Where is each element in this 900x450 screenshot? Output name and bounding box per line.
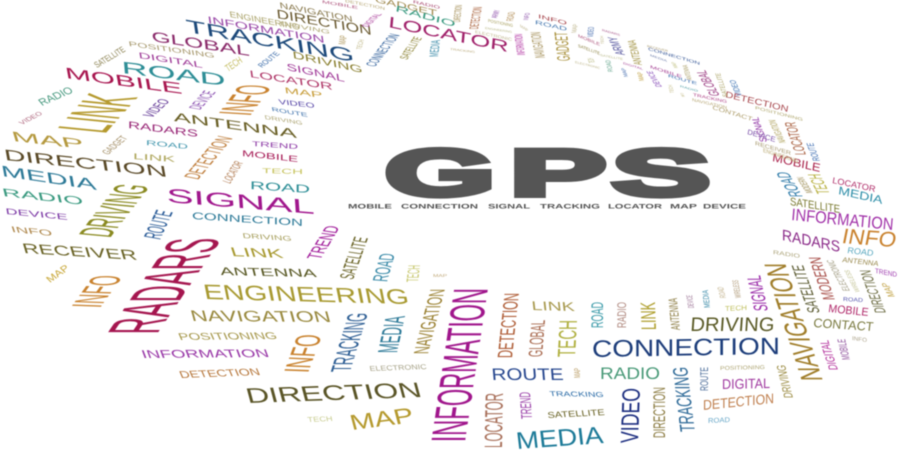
words: top centre: RADIO <box>395 3 456 29</box>
words: lower centre <box>420 288 796 450</box>
words: top centre: TECH <box>585 58 597 63</box>
words: top centre: SATELLITE <box>578 43 600 56</box>
words: upper left: DRIVING <box>280 20 330 35</box>
words: upper right: NAVIGATION <box>692 97 727 110</box>
words: lower centre: TRACKING <box>667 367 700 432</box>
words: lower left: LINK <box>228 244 286 261</box>
words: lower left: ELECTRONIC <box>369 362 427 372</box>
words: lower left: MEDIA <box>371 315 411 353</box>
words: upper right: SATELLITE <box>713 73 730 97</box>
words: right side: MAP <box>879 283 897 297</box>
words: upper left: DIRECTION <box>276 6 372 38</box>
words: right side: DIGITAL <box>816 340 841 370</box>
words: right side: ELECTRONIC <box>824 260 852 291</box>
words: upper left: DRIVING <box>67 182 160 239</box>
words: right side: SIGNAL <box>749 117 769 142</box>
words: right side: ROAD <box>843 296 863 303</box>
word: LINK: LINK <box>40 90 154 136</box>
words: right side: CONTACT <box>712 104 754 122</box>
words: right side: MEDIA <box>838 184 884 207</box>
words: right side: RECEIVER <box>755 140 791 156</box>
words: upper right: TECH <box>599 36 605 44</box>
words: upper left: DETECTION <box>178 134 238 181</box>
words: upper left: INFORMATION <box>207 14 325 45</box>
word: DIRECTION: DIRECTION <box>2 146 169 180</box>
words: right side: TECH <box>803 174 834 194</box>
words: right side: ANTENNA <box>842 256 880 268</box>
words: upper left <box>0 0 372 241</box>
words: upper left: VIDEO <box>139 97 173 119</box>
word: NAVIGATION: NAVIGATION <box>188 307 333 325</box>
words: right side: TREND <box>875 266 897 279</box>
words: top centre: ROAD <box>504 12 517 21</box>
words: lower left: POSITIONING <box>176 330 279 342</box>
words: upper right: INFO <box>679 93 686 97</box>
words: upper right: GLOBAL <box>692 70 723 96</box>
words: upper left: TECH <box>262 166 303 176</box>
words: upper right: ANTENNA <box>625 40 644 65</box>
word: SIGNAL: SIGNAL <box>166 184 316 218</box>
words: lower left: DETECTION <box>177 366 262 380</box>
words: upper right: ANTENNA <box>680 65 694 80</box>
word: INFORMATION: INFORMATION <box>420 288 498 442</box>
words: upper left: TECH <box>223 54 244 74</box>
word: LOCATOR: LOCATOR <box>388 13 509 55</box>
words: lower centre: DIRECTION <box>649 387 669 438</box>
words: lower left: INFO <box>276 334 330 373</box>
words: upper left: MEDIA <box>0 162 99 194</box>
words: right side: ROAD <box>771 172 807 197</box>
words: top centre: CONNECTION <box>362 32 403 68</box>
word: ROUTE: ROUTE <box>491 364 564 384</box>
title: GPS: P <box>510 136 606 210</box>
words: upper left: RADARS <box>128 119 198 139</box>
subtitle: keyword line: MAP <box>670 204 698 210</box>
words: upper left: NAVIGATION <box>279 0 353 24</box>
words: top centre: MAP <box>336 35 349 45</box>
words: lower centre: ROAD <box>708 415 730 424</box>
words: upper right: RADARS <box>602 28 620 37</box>
words: right side: DETECTION <box>725 89 789 114</box>
word: DIRECTION: DIRECTION <box>243 377 424 408</box>
words: right side: CONTACT <box>813 315 875 334</box>
subtitle: keyword line: SIGNAL <box>488 204 530 210</box>
subtitle: keyword line: LOCATOR <box>608 204 662 210</box>
words: top centre: ELECTRONIC <box>575 60 600 70</box>
words: right side: RADIO <box>773 249 800 259</box>
title: GPS: G <box>385 136 495 210</box>
words: lower left: INFORMATION <box>139 347 271 360</box>
words: right side: POSITIONING <box>755 105 803 122</box>
words: lower left: SATELLITE <box>335 235 372 281</box>
word: INFO: INFO <box>207 83 282 117</box>
words: upper left: SIGNAL <box>286 61 346 84</box>
words: upper left: DEVICE <box>5 206 68 222</box>
word: INFO: INFO <box>840 224 899 252</box>
words: upper left: POSITIONING <box>128 40 215 60</box>
words: upper left: VIDEO <box>17 110 44 126</box>
words: lower centre: ROUTE <box>698 367 710 391</box>
word: ENGINEERING: ENGINEERING <box>201 280 411 309</box>
words: right side <box>614 89 899 381</box>
words: top centre: NAVIGATION <box>527 32 548 58</box>
words: right side: ENGINEERING <box>763 147 798 164</box>
word: MAP: MAP <box>347 402 416 434</box>
words: right side: RADARS <box>782 226 840 255</box>
words: right side: SIGNAL <box>742 275 772 311</box>
words: right side: ROAD <box>715 287 728 298</box>
words: right side: LOCATOR <box>781 122 809 155</box>
word: ANTENNA: ANTENNA <box>173 109 298 141</box>
words: top centre: VIDEO <box>585 27 596 37</box>
words: upper left: GADGET <box>99 134 130 156</box>
words: top centre: TRACKING <box>450 47 475 54</box>
words: right side: WIRELESS <box>843 270 862 292</box>
words: upper left: TREND <box>252 140 298 151</box>
words: right side: MOBILE <box>835 339 852 360</box>
words: upper right: RADIO <box>680 84 698 93</box>
words: lower left: NAVIGATION <box>408 289 450 354</box>
words: lower left: ANTENNA <box>218 265 319 279</box>
words: right side: MEDIA <box>700 290 712 308</box>
words: lower centre: TECH <box>552 320 582 357</box>
words: upper right: MAP <box>620 68 629 77</box>
words: lower centre: DETECTION <box>703 390 774 413</box>
words: right side: DIRECTION <box>856 270 889 313</box>
words: right side: LOCATOR <box>832 175 876 194</box>
words: top centre: ARMY <box>489 10 502 18</box>
subtitle: keyword line: CONNECTION <box>401 204 478 210</box>
words: upper right: VIDEO <box>727 80 744 96</box>
words: lower centre: RADIO <box>600 363 660 383</box>
words: upper left: DRIVING <box>264 114 303 126</box>
words: upper left: ROUTE <box>271 106 308 118</box>
words: upper left: SATELLITE <box>92 44 127 70</box>
words: lower left: ROAD <box>368 253 400 282</box>
words: lower centre: POSITIONING <box>720 364 765 371</box>
words: right side: ROUTE <box>804 143 822 161</box>
words: upper right: MOBILE <box>650 64 682 79</box>
words: lower left: MAP <box>44 262 72 284</box>
words: upper left: CONNECTION <box>192 210 303 228</box>
words: lower left <box>9 224 450 434</box>
words: top centre: ENGINEERING <box>485 26 512 34</box>
word: MOBILE: MOBILE <box>63 64 184 97</box>
words: top centre: ELECTRONIC <box>475 29 512 42</box>
words: lower centre: DRIVING <box>773 365 796 398</box>
words: upper left: RADIO <box>0 186 85 207</box>
words: top centre: INFORMATION <box>512 34 527 55</box>
words: lower left: INFO <box>9 224 54 238</box>
words: upper left: ENGINEERING <box>229 9 300 32</box>
words: lower centre: DETECTION <box>492 293 524 358</box>
words: top centre: INFO <box>538 13 567 26</box>
words: top centre: DETECTION <box>466 7 485 29</box>
words: lower centre: TREND <box>516 392 535 419</box>
word: ROAD: ROAD <box>121 57 226 90</box>
words: upper left: LOCATOR <box>249 68 333 92</box>
words: upper right: ROAD <box>603 60 614 72</box>
words: top centre <box>322 0 600 70</box>
words: upper left: ROAD <box>250 179 310 195</box>
words: lower left: TECH <box>402 265 424 282</box>
words: top centre: ROAD <box>535 19 567 32</box>
words: lower centre: TRACKING <box>549 390 604 399</box>
words: right side: MODERN <box>804 257 839 300</box>
words: upper right: DEVICE <box>644 71 664 87</box>
words: right side: DEVICE <box>684 295 696 308</box>
words: top centre: SATELLITE <box>397 35 424 61</box>
words: upper left: MAP <box>9 128 86 152</box>
words: right side: ROAD <box>847 245 874 258</box>
words: top centre: MAP <box>520 23 528 33</box>
words: upper right: MAP <box>635 72 646 81</box>
words: lower left: DRIVING <box>242 232 292 243</box>
words: upper right: SATELLITE <box>600 53 623 61</box>
subtitle: keyword line: MOBILE <box>348 204 393 210</box>
words: lower left: MAP <box>433 273 447 278</box>
words: lower centre: LINK <box>531 298 576 314</box>
words: upper right: MAP <box>670 62 679 68</box>
words: upper left: ROAD <box>146 138 188 151</box>
words: right side: RADIO <box>614 302 629 328</box>
words: right side: INFORMATION <box>791 204 894 234</box>
words: upper right: TECH <box>667 85 675 93</box>
subtitle: keyword line <box>348 204 747 210</box>
words: upper right: RECEIVER <box>647 44 668 53</box>
word: INFO: INFO <box>61 275 132 308</box>
title: GPS <box>385 136 710 210</box>
subtitle: keyword line: DEVICE <box>703 204 747 210</box>
words: right side: WIRELESS <box>730 280 743 298</box>
word: VIDEO: VIDEO <box>615 388 645 443</box>
words: upper left: RADIO <box>36 84 76 108</box>
words: upper left: ROUTE <box>256 50 282 69</box>
words: lower left: TREND <box>302 224 344 261</box>
words: right side: SATELLITE <box>787 265 824 313</box>
words: upper left: VIDEO <box>278 98 315 110</box>
word: RADARS: RADARS <box>89 238 238 334</box>
words: right side: NAVIGATION <box>766 120 788 143</box>
words: lower centre: DIGITAL <box>722 375 770 392</box>
words: top centre: POSITIONING <box>488 18 513 28</box>
word: NAVIGATION: NAVIGATION <box>756 263 830 381</box>
words: lower centre: ROAD <box>587 302 607 328</box>
words: lower left: TECH <box>307 414 333 424</box>
words: upper left: MAP <box>284 85 323 100</box>
words: top centre: DIGITAL <box>359 13 384 27</box>
words: upper right <box>599 28 744 110</box>
words: upper right: DIGITAL <box>623 61 643 71</box>
words: right side: INFO <box>852 335 867 343</box>
words: lower centre: GLOBAL <box>524 320 549 357</box>
words: top centre: DIRECTION <box>451 5 464 22</box>
words: right side: MOBILE <box>772 151 821 174</box>
words: upper left: DEVICE <box>184 89 220 111</box>
words: upper left: GLOBAL <box>151 28 251 59</box>
words: right side: TECH <box>725 303 747 312</box>
words: upper left: DRIVING <box>292 49 363 75</box>
words: upper left: LINK <box>133 151 176 164</box>
word: CONNECTION: CONNECTION <box>592 332 780 362</box>
words: upper left: MOBILE <box>242 148 298 164</box>
words: right side: LINK <box>635 301 660 330</box>
words: top centre: INFO <box>522 13 532 20</box>
words: top centre: MOBILE <box>578 33 600 47</box>
subtitle: keyword line: TRACKING <box>540 204 600 210</box>
words: lower centre: MAP <box>572 368 582 378</box>
words: upper left: LOCATOR <box>220 159 245 185</box>
words: upper left: DIGITAL <box>138 50 204 70</box>
words: top centre: MEDIA <box>426 40 443 57</box>
words: lower left: TRACKING <box>324 313 374 372</box>
words: top centre: MAP <box>570 24 580 33</box>
words: upper left: ROUTE <box>138 208 178 241</box>
words: upper right: ROUTE <box>668 73 697 86</box>
words: right side: MODERN <box>794 177 815 193</box>
word: DRIVING: DRIVING <box>690 313 775 335</box>
words: right side: SATELLITE <box>790 195 840 215</box>
words: upper right: MEDIA <box>650 53 667 63</box>
words: lower centre: SATELLITE <box>547 407 605 420</box>
words: right side: ANTENNA <box>665 298 683 330</box>
words: lower centre: LOCATOR <box>479 393 508 448</box>
words: upper right: CONNECTION <box>648 46 700 66</box>
word: TRACKING: TRACKING <box>184 15 356 66</box>
words: right side: DEVICE <box>747 128 776 144</box>
title: GPS: S <box>612 136 710 210</box>
words: top centre: TECH <box>354 39 366 50</box>
words: lower left: RECEIVER <box>20 240 139 263</box>
words: upper right: TRACKING <box>693 92 727 104</box>
word: GADGET: GADGET <box>550 32 574 61</box>
words: upper right: ARMY <box>604 37 628 55</box>
words: right side: MOBILE <box>828 302 869 318</box>
